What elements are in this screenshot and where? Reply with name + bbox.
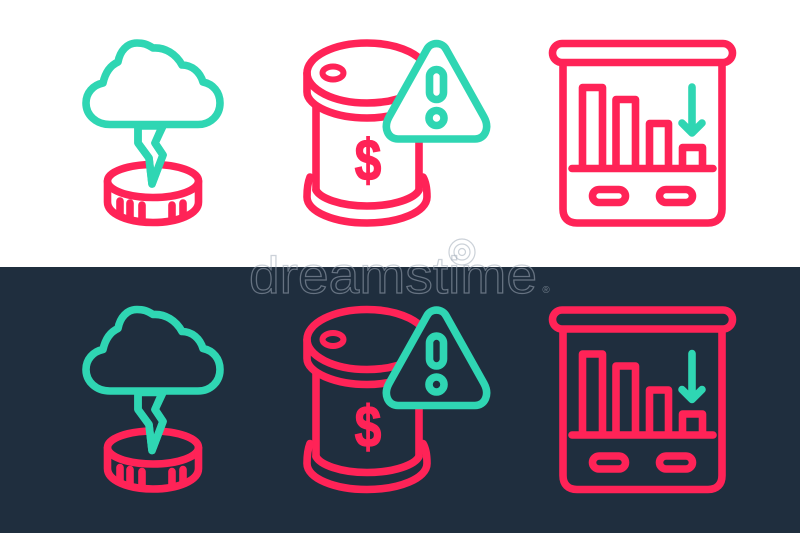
board xyxy=(552,44,732,223)
icon: oil barrel with warning, light xyxy=(307,43,487,223)
icon: presentation board with falling bars, light xyxy=(552,44,732,223)
watermark logo xyxy=(449,239,475,265)
buttons xyxy=(592,456,692,469)
warning triangle xyxy=(386,44,487,139)
arrow down xyxy=(682,87,702,133)
icon: storm cloud over coin, light xyxy=(86,43,220,222)
icon: presentation board with falling bars, dark xyxy=(552,310,732,490)
warning triangle xyxy=(386,310,487,406)
board xyxy=(552,310,732,490)
panel: white top band xyxy=(0,0,800,267)
coin xyxy=(108,431,198,489)
bar chart xyxy=(572,88,713,168)
icon: storm cloud over coin, dark xyxy=(86,310,220,489)
bar chart xyxy=(572,354,713,435)
cloud with lightning xyxy=(86,310,220,450)
watermark registered mark: ® xyxy=(542,285,550,296)
arrow down xyxy=(682,354,702,400)
buttons xyxy=(592,190,692,202)
panel: dark bottom band xyxy=(0,267,800,533)
watermark wordmark: dreamstime xyxy=(249,247,537,305)
dollar sign: $ xyxy=(355,129,381,193)
cloud with lightning xyxy=(86,43,220,184)
dollar sign: $ xyxy=(355,395,381,460)
watermark xyxy=(249,239,550,305)
coin xyxy=(108,164,198,222)
barrel xyxy=(307,310,427,490)
icon: oil barrel with warning, dark xyxy=(307,310,487,490)
barrel xyxy=(307,43,427,223)
